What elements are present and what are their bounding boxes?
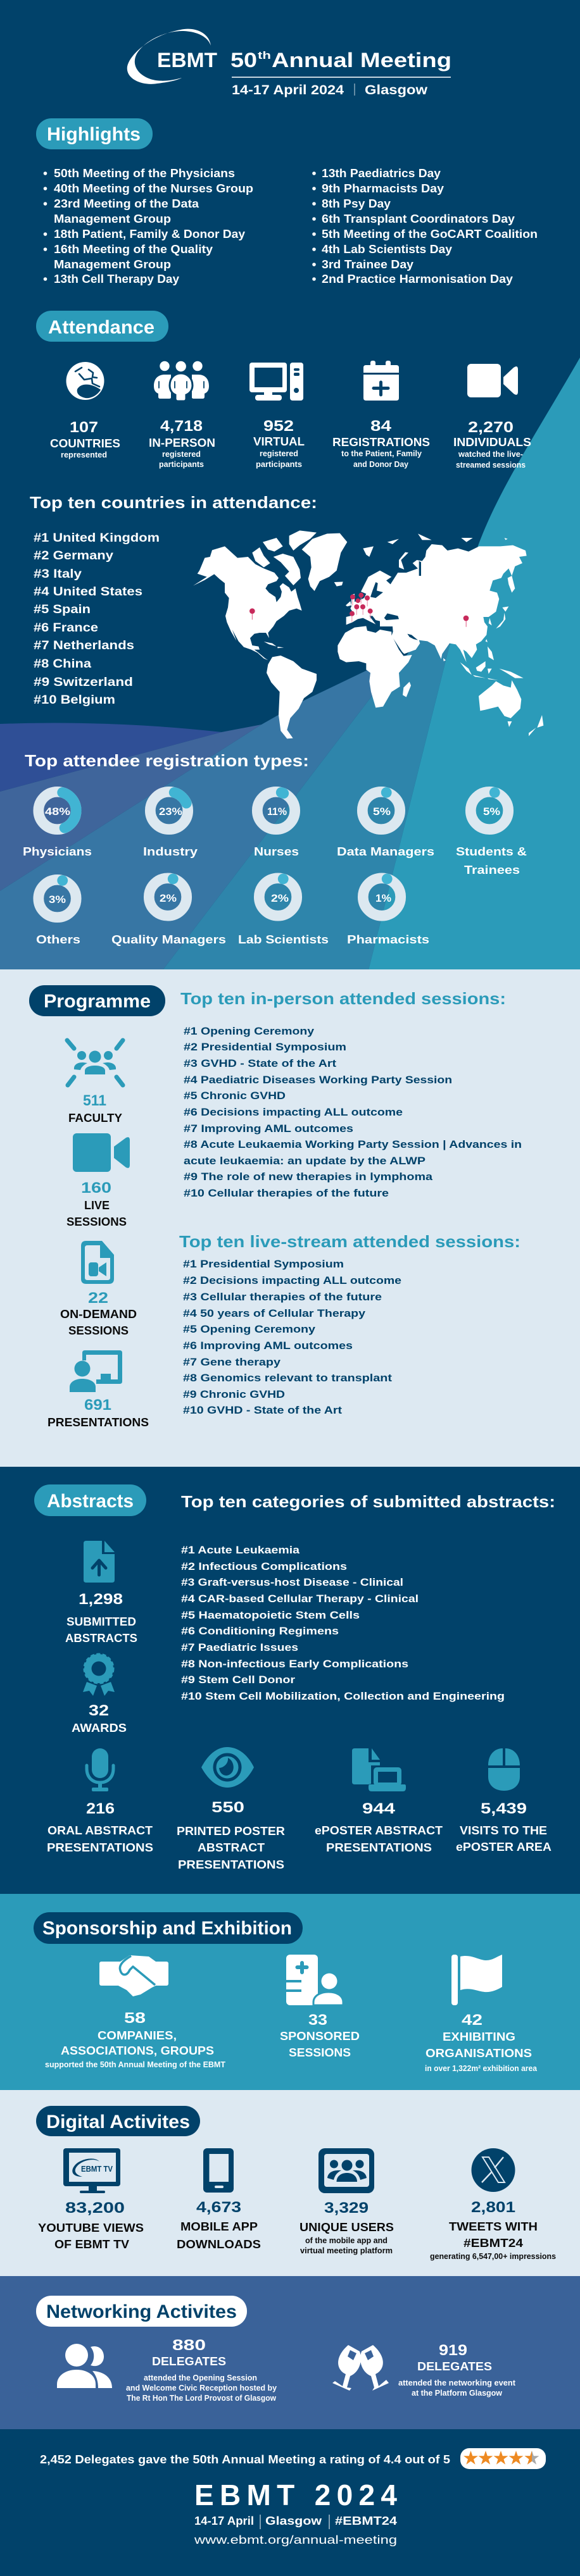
stat: 550 printed poster abstract presentations: 550 bbox=[211, 1799, 244, 1816]
list: live-stream sessions: #4 50 years of Cellular Therapy bbox=[183, 1308, 366, 1319]
stat: 4,673 mobile app downloads bbox=[177, 2148, 261, 2251]
list: live-stream sessions: #7 Gene therapy bbox=[183, 1357, 281, 1368]
list: in-person sessions: #3 GVHD - State of the Art bbox=[184, 1058, 337, 1069]
list: abstract categories: #4 CAR-based Cellular Therapy - Clinical bbox=[181, 1593, 419, 1605]
heading: Abstracts: Abstracts bbox=[47, 1491, 134, 1512]
heading: Networking Activites bbox=[36, 2296, 247, 2327]
stat: 5,439 visits to the ePoster area bbox=[456, 1748, 552, 1853]
donut chart: Others 3%: Others bbox=[36, 933, 80, 946]
map: Europe, Africa, Asia and Oceania bbox=[337, 533, 543, 736]
stat: 83,200 YouTube views: OF EBMT TV bbox=[54, 2238, 129, 2251]
list: in-person sessions: #5 Chronic GVHD bbox=[184, 1090, 286, 1102]
icon: video camera bbox=[73, 1133, 130, 1172]
stat: 32 awards bbox=[72, 1654, 127, 1734]
stat: 550 printed poster abstract presentations bbox=[177, 1747, 285, 1871]
list: live-stream sessions: #10 GVHD - State of the Art bbox=[183, 1405, 343, 1416]
list: top ten countries: #4 United States bbox=[34, 585, 142, 599]
list: abstract categories: #5 Haematopoietic Stem Cells bbox=[181, 1610, 360, 1621]
list: top ten countries: #6 France bbox=[34, 621, 98, 635]
stat: 2,801 tweets: #EBMT24 bbox=[463, 2237, 523, 2249]
list: top ten countries: #7 Netherlands bbox=[34, 639, 134, 652]
stat: 42 exhibiting organisations bbox=[425, 1955, 538, 2073]
stat: 160 live sessions: SESSIONS bbox=[66, 1216, 127, 1228]
stat: 919 delegates: attended the networking event bbox=[398, 2378, 516, 2387]
stat: 22 on-demand sessions: SESSIONS bbox=[68, 1324, 129, 1337]
list: abstract categories: #1 Acute Leukaemia bbox=[181, 1545, 300, 1556]
list: abstract categories: #7 Paediatric Issues bbox=[181, 1642, 298, 1653]
stat: 5,439 visits to the ePoster area: 5,439 bbox=[481, 1800, 527, 1817]
stat: 2,270 individuals: 2,270 bbox=[468, 419, 514, 436]
list: top ten countries bbox=[34, 532, 160, 707]
stat: 2,270 individuals: INDIVIDUALS bbox=[453, 436, 531, 449]
stat: 3,329 unique users: of the mobile app and bbox=[305, 2236, 388, 2245]
stat: 107 countries: 107 bbox=[70, 419, 98, 436]
list: top ten countries: #8 China bbox=[34, 657, 91, 671]
list: highlights right column: 4th Lab Scientists Day bbox=[322, 243, 452, 256]
heading: Programme bbox=[29, 985, 165, 1016]
list: abstract categories: #8 Non-infectious Early Complications bbox=[181, 1658, 408, 1670]
world map bbox=[193, 530, 543, 738]
icon: document and laptop bbox=[352, 1748, 406, 1791]
list: abstract categories: #2 Infectious Complications bbox=[181, 1561, 347, 1572]
stat: 919 delegates: at the Platform Glasgow bbox=[412, 2388, 503, 2398]
stat: 216 oral abstract presentations: 216 bbox=[86, 1800, 115, 1817]
stat: 33 sponsored sessions bbox=[280, 1955, 360, 2059]
list: top ten countries: #5 Spain bbox=[34, 603, 91, 616]
list: highlights right column: 3rd Trainee Day bbox=[322, 258, 413, 271]
stat: 952 virtual: registered bbox=[260, 449, 298, 458]
stat: 944 ePoster abstract presentations bbox=[315, 1748, 443, 1854]
stat: 160 live sessions bbox=[66, 1133, 130, 1228]
rating stars bbox=[460, 2448, 546, 2469]
list: in-person sessions: #1 Opening Ceremony bbox=[184, 1026, 315, 1037]
icon: video camera bbox=[467, 364, 518, 397]
stat: 160 live sessions: LIVE bbox=[84, 1199, 110, 1212]
list: highlights right column: 9th Pharmacists Day bbox=[322, 182, 444, 195]
donut chart: Physicians 48% bbox=[23, 787, 92, 858]
donut chart: Pharmacists 1%: Pharmacists bbox=[347, 933, 429, 946]
heading: Highlights bbox=[36, 118, 153, 149]
stat: 4,718 in-person: IN-PERSON bbox=[149, 437, 215, 449]
stat: 42 exhibiting organisations: in over 1,322m² exhibition area bbox=[425, 2063, 538, 2073]
list: highlights left column: 18th Patient, Family & Donor Day bbox=[54, 228, 245, 240]
stat: 22 on-demand sessions: 22 bbox=[88, 1290, 108, 1307]
stat: 3,329 unique users bbox=[299, 2148, 394, 2255]
stat: 4,673 mobile app downloads: MOBILE APP bbox=[180, 2220, 258, 2233]
stat: 880 delegates bbox=[57, 2337, 277, 2403]
stat: 22 on-demand sessions: ON-DEMAND bbox=[60, 1308, 137, 1321]
icon: desktop computer bbox=[249, 363, 303, 401]
stat: 84 registrations: REGISTRATIONS bbox=[332, 436, 430, 449]
stat: 880 delegates: DELEGATES bbox=[152, 2355, 226, 2368]
stat: 83,200 YouTube views: 83,200 bbox=[65, 2200, 125, 2217]
stat: 2,801 tweets: TWEETS WITH bbox=[449, 2220, 538, 2233]
heading: Highlights: Highlights bbox=[47, 124, 141, 145]
list: top ten countries: #1 United Kingdom bbox=[34, 532, 160, 545]
logo: EBMT 50th Annual Meeting: Annual Meeting bbox=[272, 49, 451, 72]
list: highlights left column bbox=[44, 167, 253, 285]
list: highlights left column: 23rd Meeting of the Data bbox=[54, 197, 199, 210]
list: live-stream sessions: #9 Chronic GVHD bbox=[183, 1389, 285, 1400]
donut chart: Nurses 11%: Nurses bbox=[254, 845, 299, 858]
logo: EBMT 50th Annual Meeting: EBMT bbox=[157, 49, 217, 72]
panel: sponsorship background bbox=[0, 1894, 580, 2090]
heading: top ten categories: Top ten categories of submitted abstracts: bbox=[181, 1492, 555, 1511]
icon: medical calendar bbox=[363, 361, 399, 401]
stat: 691 presentations: PRESENTATIONS bbox=[47, 1416, 149, 1429]
stat: 84 registrations bbox=[332, 361, 430, 469]
stat: 511 faculty: 511 bbox=[83, 1092, 106, 1109]
stat: 550 printed poster abstract presentations: PRESENTATIONS bbox=[178, 1858, 284, 1871]
panel: footer background bbox=[0, 2429, 580, 2576]
footer title: EBMT 2024 bbox=[194, 2479, 397, 2511]
stat: 1,298 submitted abstracts: SUBMITTED bbox=[66, 1615, 136, 1628]
stat: 2,801 tweets: generating 6,547,00+ impressions bbox=[430, 2251, 556, 2261]
icon: sponsored session person and document bbox=[286, 1955, 343, 2005]
icon: handshake bbox=[99, 1955, 168, 1996]
stat: 550 printed poster abstract presentations: PRINTED POSTER bbox=[177, 1825, 285, 1838]
stat: 4,718 in-person: participants bbox=[159, 459, 204, 469]
stat: 4,673 mobile app downloads: 4,673 bbox=[196, 2199, 241, 2216]
stat: 952 virtual: participants bbox=[256, 459, 302, 469]
logo: EBMT 50th Annual Meeting bbox=[127, 29, 451, 97]
heading: Networking Activites: Networking Activites bbox=[46, 2301, 237, 2322]
list: in-person sessions bbox=[184, 1026, 522, 1199]
list: highlights right column: 13th Paediatrics Day bbox=[322, 167, 441, 180]
list: highlights right column: 2nd Practice Harmonisation Day bbox=[322, 273, 513, 285]
donut chart: Industry 23% bbox=[143, 787, 198, 858]
list: highlights right column bbox=[312, 167, 538, 285]
stat: 880 delegates: and Welcome Civic Reception hosted by bbox=[126, 2383, 277, 2392]
stat: 691 presentations bbox=[47, 1350, 149, 1429]
stat: 33 sponsored sessions: SPONSORED bbox=[280, 2030, 360, 2043]
stat: 919 delegates: DELEGATES bbox=[417, 2360, 492, 2373]
stat: 952 virtual: 952 bbox=[263, 418, 294, 435]
stat: 58 companies bbox=[45, 1955, 225, 2069]
heading: Sponsorship and Exhibition bbox=[34, 1912, 303, 1944]
list: abstract categories: #10 Stem Cell Mobilization, Collection and Engineering bbox=[181, 1691, 505, 1702]
list: live-stream sessions: #6 Improving AML outcomes bbox=[183, 1340, 353, 1352]
panel: digital activities background bbox=[0, 2090, 580, 2276]
stat: 691 presentations: 691 bbox=[84, 1397, 111, 1414]
stat: 32 awards: AWARDS bbox=[72, 1722, 127, 1734]
stat: 84 registrations: to the Patient, Family bbox=[341, 449, 422, 458]
list: live-stream sessions: #8 Genomics relevant to transplant bbox=[183, 1372, 393, 1384]
stat: 22 on-demand sessions bbox=[60, 1241, 137, 1337]
stat: 4,718 in-person: 4,718 bbox=[160, 418, 203, 435]
stat: 4,673 mobile app downloads: DOWNLOADS bbox=[177, 2238, 261, 2251]
panel: networking background bbox=[0, 2276, 580, 2429]
icon: video file bbox=[81, 1241, 114, 1284]
icon: upload file bbox=[84, 1541, 115, 1583]
list: live-stream sessions: #1 Presidential Symposium bbox=[183, 1259, 344, 1270]
icon: presenter at board bbox=[70, 1350, 122, 1392]
heading: registration types: Top attendee registration types: bbox=[25, 751, 309, 770]
donut chart: Nurses 11% bbox=[253, 787, 299, 858]
donut chart: Quality Managers 2% bbox=[111, 874, 226, 946]
icon: EBMT TV monitor bbox=[63, 2148, 120, 2193]
stat: 84 registrations: 84 bbox=[370, 418, 392, 435]
icon: microphone bbox=[87, 1748, 113, 1791]
rating text: 2,452 Delegates gave the 50th Annual Meeting a rating of 4.4 out of 5 bbox=[40, 2453, 450, 2466]
heading: Programme: Programme bbox=[44, 991, 151, 1012]
icon: users screen bbox=[318, 2148, 374, 2193]
donut chart: Nurses 11%: 11% bbox=[267, 806, 287, 818]
donut chart: Students and Trainees 5%: 5% bbox=[483, 806, 500, 818]
stat: 511 faculty: FACULTY bbox=[68, 1112, 122, 1124]
donut chart: Physicians 48%: 48% bbox=[45, 806, 70, 818]
donut chart: Quality Managers 2%: 2% bbox=[160, 892, 177, 904]
donut chart: Data Managers 5%: 5% bbox=[373, 806, 391, 818]
stat: 919 delegates: 919 bbox=[439, 2342, 467, 2359]
list: highlights right column: 8th Psy Day bbox=[322, 197, 391, 210]
heading: Attendance bbox=[36, 311, 168, 342]
stat: 944 ePoster abstract presentations: ePOSTER ABSTRACT bbox=[315, 1824, 443, 1837]
donut chart: Quality Managers 2%: Quality Managers bbox=[111, 933, 226, 946]
donut chart: Others 3%: 3% bbox=[49, 893, 66, 905]
stat: 5,439 visits to the ePoster area: ePOSTER AREA bbox=[456, 1841, 552, 1853]
icon: faculty group bbox=[67, 1040, 123, 1085]
list: in-person sessions: #10 Cellular therapies of the future bbox=[184, 1188, 389, 1199]
donut chart: Industry 23%: Industry bbox=[143, 845, 198, 858]
icon: rosette award bbox=[83, 1654, 115, 1696]
stat: 83,200 YouTube views bbox=[38, 2148, 144, 2251]
stat: 3,329 unique users: 3,329 bbox=[324, 2200, 369, 2217]
stat: 107 countries: COUNTRIES bbox=[50, 437, 120, 450]
list: highlights right column: 6th Transplant Coordinators Day bbox=[322, 213, 515, 225]
stat: 32 awards: 32 bbox=[89, 1702, 109, 1719]
donut chart: Lab Scientists 2% bbox=[238, 874, 329, 946]
list: live-stream sessions: #5 Opening Ceremony bbox=[183, 1324, 316, 1335]
stat: 2,801 tweets bbox=[430, 2148, 556, 2261]
stat: 2,801 tweets: 2,801 bbox=[471, 2199, 515, 2216]
icon: globe bbox=[66, 362, 104, 400]
list: top ten countries: #2 Germany bbox=[34, 549, 113, 563]
heading: top ten in-person sessions: Top ten in-person attended sessions: bbox=[180, 989, 506, 1008]
stat: 107 countries: represented bbox=[61, 450, 107, 459]
stat: 3,329 unique users: UNIQUE USERS bbox=[299, 2221, 394, 2234]
stat: 880 delegates: The Rt Hon The Lord Provost of Glasgow bbox=[127, 2393, 277, 2403]
icon: clinking glasses bbox=[332, 2345, 389, 2391]
heading: Digital Activites bbox=[36, 2106, 200, 2136]
stat: 880 delegates: attended the Opening Session bbox=[144, 2373, 257, 2382]
stat: 919 delegates bbox=[332, 2342, 516, 2398]
stat: 33 sponsored sessions: SESSIONS bbox=[289, 2046, 351, 2059]
list: in-person sessions: #2 Presidential Symposium bbox=[184, 1042, 346, 1053]
list: highlights left column: 50th Meeting of the Physicians bbox=[54, 167, 235, 180]
donut chart: Data Managers 5%: Data Managers bbox=[337, 845, 434, 858]
stat: 58 companies: ASSOCIATIONS, GROUPS bbox=[61, 2044, 214, 2057]
list: live-stream sessions: #3 Cellular therapies of the future bbox=[183, 1291, 382, 1303]
footer details bbox=[194, 2515, 397, 2529]
heading: Attendance: Attendance bbox=[48, 317, 154, 338]
donut chart: Others 3% bbox=[34, 875, 80, 946]
list: highlights left column: Management Group bbox=[54, 258, 171, 271]
map pins bbox=[249, 593, 469, 627]
stat: 84 registrations: and Donor Day bbox=[353, 459, 409, 469]
logo: EBMT 50th Annual Meeting: Glasgow bbox=[365, 83, 428, 97]
stat: 944 ePoster abstract presentations: PRESENTATIONS bbox=[326, 1841, 432, 1854]
stat: 83,200 YouTube views: YOUTUBE VIEWS bbox=[38, 2222, 144, 2234]
stat: 944 ePoster abstract presentations: 944 bbox=[362, 1800, 396, 1817]
heading: Abstracts bbox=[34, 1484, 146, 1516]
stat: 216 oral abstract presentations: PRESENTATIONS bbox=[47, 1841, 153, 1854]
donut chart: Lab Scientists 2%: Lab Scientists bbox=[238, 933, 329, 946]
donut chart: Pharmacists 1% bbox=[347, 874, 429, 946]
icon: EBMT TV monitor: EBMT TV bbox=[81, 2164, 113, 2174]
stat: 2,270 individuals bbox=[453, 364, 531, 470]
panel: header, highlights and attendance background bbox=[0, 0, 580, 970]
list: in-person sessions: acute leukaemia: an update by the ALWP bbox=[184, 1155, 426, 1167]
stat: 2,270 individuals: watched the live- bbox=[458, 449, 523, 459]
list: in-person sessions: #6 Decisions impacting ALL outcome bbox=[184, 1107, 403, 1118]
stat: 58 companies: COMPANIES, bbox=[98, 2029, 177, 2042]
stat: 42 exhibiting organisations: 42 bbox=[462, 2012, 482, 2029]
donut chart: Data Managers 5% bbox=[337, 787, 434, 858]
stat: 216 oral abstract presentations bbox=[47, 1748, 153, 1854]
icon: eye bbox=[201, 1747, 254, 1788]
logo: EBMT 50th Annual Meeting: 14-17 April 2024 bbox=[232, 83, 344, 97]
stat: 1,298 submitted abstracts: 1,298 bbox=[79, 1591, 123, 1608]
list: abstract categories: #3 Graft-versus-host Disease - Clinical bbox=[181, 1577, 403, 1588]
stat: 952 virtual: VIRTUAL bbox=[253, 435, 305, 448]
stat: 107 countries bbox=[50, 362, 120, 459]
list: in-person sessions: #7 Improving AML outcomes bbox=[184, 1123, 353, 1135]
list: in-person sessions: #8 Acute Leukaemia Working Party Session | Advances in bbox=[184, 1139, 522, 1150]
heading: Sponsorship and Exhibition: Sponsorship and Exhibition bbox=[42, 1918, 292, 1939]
list: highlights left column: 40th Meeting of the Nurses Group bbox=[54, 182, 253, 195]
footer website: www.ebmt.org/annual-meeting bbox=[194, 2534, 397, 2546]
stat: 1,298 submitted abstracts: ABSTRACTS bbox=[65, 1632, 137, 1645]
stat: 42 exhibiting organisations: ORGANISATIONS bbox=[426, 2047, 532, 2060]
panel: programme background bbox=[0, 969, 580, 1467]
list: in-person sessions: #9 The role of new therapies in lymphoma bbox=[184, 1171, 433, 1183]
footer details: #EBMT24 bbox=[335, 2515, 397, 2527]
stat: 33 sponsored sessions: 33 bbox=[308, 2012, 327, 2029]
donut chart: Students and Trainees 5%: Trainees bbox=[464, 864, 520, 876]
stat: 42 exhibiting organisations: EXHIBITING bbox=[443, 2031, 515, 2043]
stat: 58 companies: 58 bbox=[124, 2010, 146, 2027]
map: Americas and Greenland bbox=[193, 530, 355, 738]
stat: 952 virtual bbox=[249, 363, 305, 469]
list: top ten countries: #10 Belgium bbox=[34, 694, 115, 707]
donut chart: Students and Trainees 5%: Students & bbox=[456, 845, 527, 858]
stat: 511 faculty bbox=[67, 1040, 123, 1124]
donut chart: Industry 23%: 23% bbox=[159, 806, 182, 818]
donut chart: Physicians 48%: Physicians bbox=[23, 845, 92, 858]
icon: three people bbox=[154, 361, 209, 401]
logo: EBMT 50th Annual Meeting: 50 bbox=[230, 49, 257, 72]
list: abstract categories: #6 Conditioning Regimens bbox=[181, 1626, 339, 1637]
stat: 4,718 in-person bbox=[149, 361, 215, 469]
icon: X logo bbox=[471, 2148, 515, 2192]
stat: 216 oral abstract presentations: ORAL ABSTRACT bbox=[47, 1824, 153, 1837]
logo: EBMT 50th Annual Meeting: th bbox=[258, 49, 271, 61]
stat: 3,329 unique users: virtual meeting platform bbox=[300, 2246, 393, 2255]
icon: flag bbox=[451, 1955, 502, 2005]
stat: 5,439 visits to the ePoster area: VISITS TO THE bbox=[460, 1824, 547, 1837]
footer details: 14-17 April bbox=[194, 2515, 254, 2527]
icon: two people bbox=[57, 2344, 112, 2388]
donut chart: Students and Trainees 5% bbox=[456, 787, 527, 876]
list: highlights left column: Management Group bbox=[54, 213, 171, 225]
icon: smartphone bbox=[203, 2148, 234, 2193]
list: live-stream sessions bbox=[183, 1259, 401, 1416]
list: abstract categories bbox=[181, 1545, 505, 1702]
panel: abstracts background bbox=[0, 1467, 580, 1895]
donut chart: Pharmacists 1%: 1% bbox=[375, 892, 391, 904]
list: top ten countries: #9 Switzerland bbox=[34, 676, 133, 689]
icon: computer mouse bbox=[488, 1748, 520, 1791]
stat: 1,298 submitted abstracts bbox=[65, 1541, 137, 1645]
list: highlights left column: 16th Meeting of the Quality bbox=[54, 243, 213, 256]
stat: 880 delegates: 880 bbox=[172, 2337, 206, 2354]
list: top ten countries: #3 Italy bbox=[34, 568, 82, 581]
list: live-stream sessions: #2 Decisions impacting ALL outcome bbox=[183, 1275, 401, 1286]
list: abstract categories: #9 Stem Cell Donor bbox=[181, 1674, 296, 1686]
stat: 2,270 individuals: streamed sessions bbox=[456, 460, 526, 470]
stat: 4,718 in-person: registered bbox=[162, 449, 201, 459]
heading: Digital Activites: Digital Activites bbox=[46, 2112, 190, 2132]
stat: 160 live sessions: 160 bbox=[81, 1179, 111, 1197]
list: highlights left column: 13th Cell Therapy Day bbox=[54, 273, 179, 285]
heading: top ten countries: Top ten countries in attendance: bbox=[30, 493, 317, 512]
footer details: Glasgow bbox=[265, 2515, 322, 2527]
list: highlights right column: 5th Meeting of the GoCART Coalition bbox=[322, 228, 538, 240]
heading: top ten live-stream sessions: Top ten live-stream attended sessions: bbox=[179, 1232, 520, 1251]
list: in-person sessions: #4 Paediatric Diseases Working Party Session bbox=[184, 1074, 452, 1086]
stat: 58 companies: supported the 50th Annual Meeting of the EBMT bbox=[45, 2060, 225, 2069]
donut chart: Lab Scientists 2%: 2% bbox=[271, 892, 289, 904]
stat: 550 printed poster abstract presentations: ABSTRACT bbox=[198, 1841, 265, 1854]
